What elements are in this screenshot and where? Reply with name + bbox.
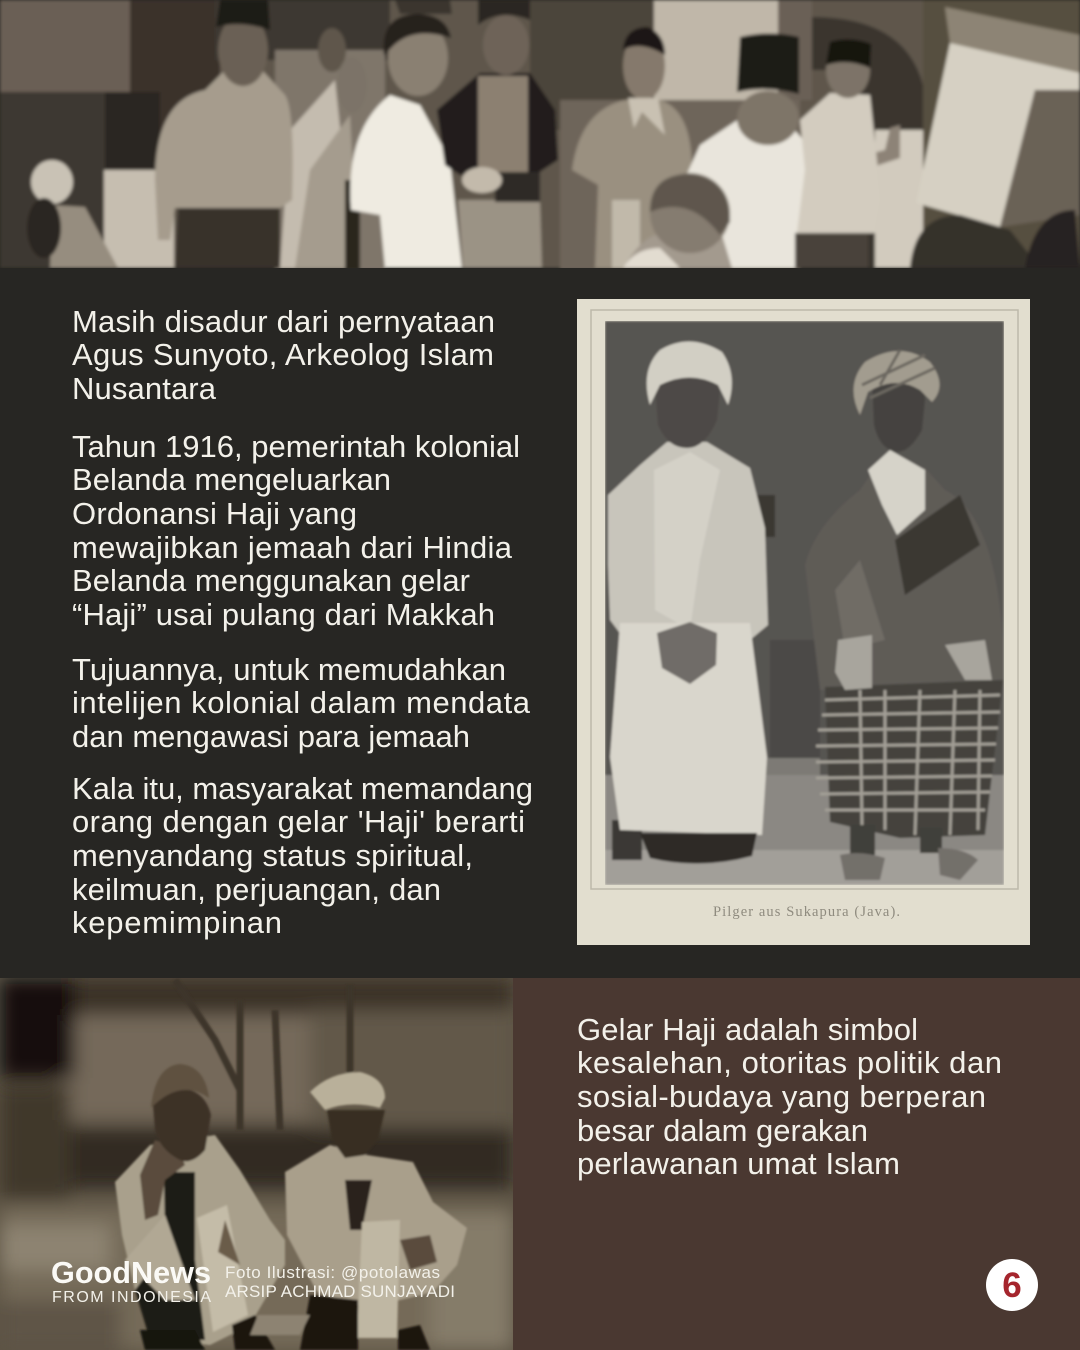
text block: public view of the title: Kala itu, masyarakat memandang <box>72 771 533 806</box>
text block: source statement: Nusantara <box>72 371 217 406</box>
logo: GoodNews from Indonesia <box>51 1255 211 1306</box>
logo: GoodNews from Indonesia: GoodNews <box>51 1255 211 1290</box>
text block: 1916 Hajj ordinance: Tahun 1916, pemerintah kolonial <box>72 429 520 464</box>
text block: purpose of the ordinance: Tujuannya, untuk memudahkan <box>72 652 506 687</box>
seated person bottom left <box>31 160 73 204</box>
text block: purpose of the ordinance <box>72 652 531 754</box>
callout: meaning of the Haji title: besar dalam gerakan <box>577 1113 868 1148</box>
panel: brown callout background <box>513 978 1080 1350</box>
photo: two men squatting holding papers <box>0 978 513 1350</box>
callout: meaning of the Haji title: sosial-budaya yang berperan <box>577 1079 986 1114</box>
text block: source statement: Masih disadur dari pernyataan <box>72 304 495 339</box>
photo: postcard of two pilgrims from Sukapura <box>577 299 1030 945</box>
text block: purpose of the ordinance: dan mengawasi para jemaah <box>72 719 470 754</box>
text block: public view of the title: orang dengan gelar 'Haji' berarti <box>72 804 525 839</box>
text block: 1916 Hajj ordinance: “Haji” usai pulang dari Makkah <box>72 597 495 632</box>
callout: meaning of the Haji title: perlawanan umat Islam <box>577 1146 900 1181</box>
photo: pilgrims queueing at the top <box>0 0 1080 270</box>
text block: public view of the title <box>72 771 533 940</box>
text block: 1916 Hajj ordinance: Ordonansi Haji yang <box>72 496 357 531</box>
text block: 1916 Hajj ordinance: Belanda menggunakan gelar <box>72 563 470 598</box>
callout: meaning of the Haji title: kesalehan, otoritas politik dan <box>577 1045 1002 1080</box>
right man <box>285 1072 467 1350</box>
callout: meaning of the Haji title <box>577 1012 1002 1181</box>
text block: 1916 Hajj ordinance: mewajibkan jemaah dari Hindia <box>72 530 513 565</box>
logo: GoodNews from Indonesia: FROM INDONESIA <box>52 1289 211 1306</box>
text block: public view of the title: menyandang status spiritual, <box>72 838 473 873</box>
text block: public view of the title: kepemimpinan <box>72 905 282 940</box>
text block: public view of the title: keilmuan, perjuangan, dan <box>72 872 441 907</box>
text block: purpose of the ordinance: intelijen kolonial dalam mendata <box>72 685 531 720</box>
page number badge <box>986 1259 1038 1311</box>
text block: 1916 Hajj ordinance: Belanda mengeluarkan <box>72 462 391 497</box>
postcard portrait image <box>605 321 1004 885</box>
postcard paper <box>577 299 1030 945</box>
text block: source statement <box>72 304 495 406</box>
plant shadows <box>175 980 350 1130</box>
callout: meaning of the Haji title: Gelar Haji adalah simbol <box>577 1012 918 1047</box>
photo credit: Foto Ilustrasi: @potolawas <box>225 1263 440 1282</box>
photo credit: ARSIP ACHMAD SUNJAYADI <box>225 1282 455 1301</box>
text block: source statement: Agus Sunyoto, Arkeolog Islam <box>72 337 494 372</box>
postcard caption: Pilger aus Sukapura (Java). <box>713 904 900 920</box>
text block: 1916 Hajj ordinance <box>72 429 520 632</box>
left man <box>115 1064 285 1350</box>
page number badge: 6 <box>1002 1266 1022 1305</box>
left figure <box>608 341 768 864</box>
background: dark panel <box>0 268 1080 978</box>
right figure <box>805 350 1003 880</box>
photo credit <box>225 1263 455 1301</box>
